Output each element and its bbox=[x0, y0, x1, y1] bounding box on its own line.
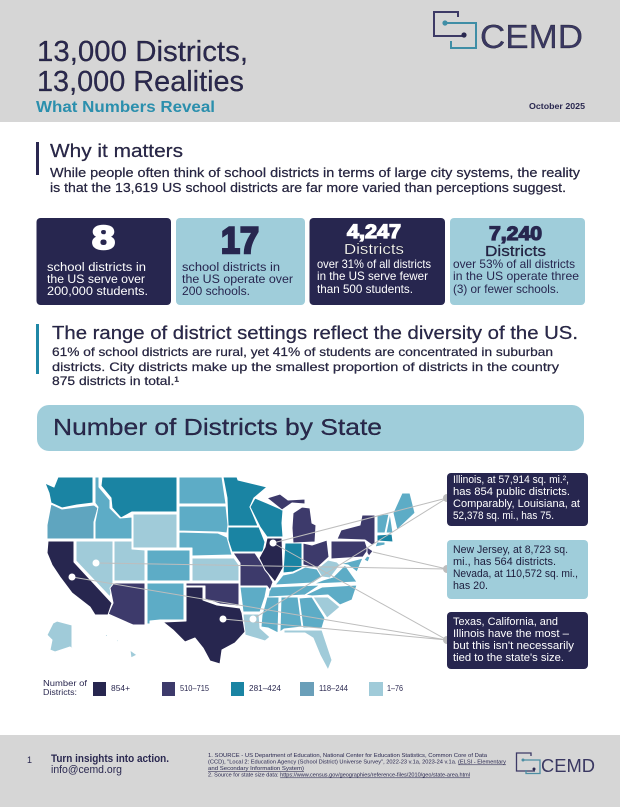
stat card: 4,247: than 500 students. bbox=[317, 283, 413, 296]
heading: range of settings: The range of district settings reflect the diversity of the US. bbox=[52, 323, 578, 343]
stat card: 17: 17 bbox=[221, 220, 259, 261]
footnotes: and Secondary Information System) bbox=[208, 766, 304, 772]
callout: Illinois: has 854 public districts. bbox=[453, 486, 570, 498]
stat card: 17: the US operate over bbox=[182, 272, 293, 286]
legend: Number of bbox=[43, 678, 88, 688]
header band bbox=[0, 0, 620, 122]
stat card: 8: 8 bbox=[92, 219, 115, 256]
callout: Texas, California, Illinois: Texas, California, and bbox=[453, 616, 558, 628]
callout: Illinois: Comparably, Louisiana, at bbox=[453, 498, 580, 510]
stat card: 8: school districts in bbox=[47, 260, 146, 274]
stat card: 7,240 bbox=[450, 218, 585, 305]
text block: range of settings: 875 districts in total.¹ bbox=[52, 374, 179, 388]
callout: New Jersey bbox=[447, 540, 588, 599]
callout: Texas, California, Illinois: tied to the state's size. bbox=[453, 652, 564, 664]
stat card: 7,240: (3) or fewer schools. bbox=[453, 282, 559, 296]
legend: 510–715 bbox=[180, 683, 209, 693]
section: range of district settings bbox=[36, 323, 578, 388]
text block: why it matters bbox=[50, 166, 581, 195]
footnotes: 1. SOURCE - US Department of Education, National Center for Education Statistics, Common Core of Data bbox=[208, 753, 488, 759]
map location dots bbox=[68, 540, 276, 622]
stat card: 17: 200 schools. bbox=[182, 284, 250, 298]
footnotes: 2. Source for state size data: https://www.census.gov/geographies/reference-files/2010/geo/state-area.html bbox=[208, 772, 470, 778]
leader lines bbox=[72, 494, 451, 644]
legend: Districts: bbox=[43, 687, 77, 697]
text block: why it matters: is that the 13,619 US school districts are far more varied than perceptions suggest. bbox=[50, 181, 566, 195]
legend: 854+ bbox=[111, 683, 130, 693]
icon: CEMD footer logo bbox=[516, 753, 595, 776]
stat card: 7,240: in the US operate three bbox=[453, 269, 579, 283]
title: 13,000 Realities bbox=[37, 66, 244, 98]
callout: Texas, California, Illinois bbox=[447, 612, 588, 669]
stat card: 17 bbox=[176, 218, 305, 305]
subtitle: What Numbers Reveal bbox=[36, 99, 215, 116]
banner: number of districts by state: Number of Districts by State bbox=[53, 414, 382, 440]
stat card: 17: school districts in bbox=[182, 260, 280, 274]
callout: Illinois bbox=[447, 473, 588, 526]
heading: why it matters: Why it matters bbox=[50, 141, 183, 161]
icon: CEMD footer logo: CEMD bbox=[541, 756, 595, 776]
date: October 2025 bbox=[529, 101, 585, 111]
stat card: 4,247: 4,247 bbox=[347, 222, 401, 243]
callout: New Jersey: Nevada, at 110,572 sq. mi., bbox=[453, 568, 578, 580]
call to action: Turn insights into action. bbox=[51, 753, 169, 765]
stat card: 4,247 bbox=[310, 218, 445, 305]
text block: range of settings: districts. City districts make up the smallest proportion of districts in the country bbox=[52, 360, 559, 374]
text block: range of settings bbox=[52, 345, 559, 388]
stat card: 7,240: Districts bbox=[485, 243, 546, 260]
stat card: 8: 200,000 students. bbox=[47, 284, 148, 298]
callout: Illinois: Illinois, at 57,914 sq. mi.², bbox=[453, 474, 569, 486]
text block: range of settings: 61% of school districts are rural, yet 41% of students are concentrated in suburban bbox=[52, 345, 553, 359]
callout: New Jersey: mi., has 564 districts. bbox=[453, 556, 556, 568]
callout: Texas, California, Illinois: but this isn't necessarily bbox=[453, 640, 575, 652]
callout: Texas, California, Illinois: Illinois have the most – bbox=[453, 628, 569, 640]
contact email: info@cemd.org bbox=[51, 764, 122, 776]
page number: 1 bbox=[27, 755, 32, 765]
stat card: 8: the US serve over bbox=[47, 272, 145, 286]
map: US states by number of districts bbox=[45, 477, 415, 670]
icon: CEMD logo bbox=[434, 12, 583, 55]
stat card: 4,247: in the US serve fewer bbox=[317, 270, 428, 283]
legend: 1–76 bbox=[387, 683, 403, 693]
title: 13,000 Districts, bbox=[37, 36, 248, 68]
callout: New Jersey: New Jersey, at 8,723 sq. bbox=[453, 544, 568, 556]
footnotes: (CCD), "Local 2: Education Agency (School District) Universe Survey", 2022-23 v.1a, 2023-24 v.1a. (ELSI - Elementary bbox=[208, 760, 506, 766]
callout: Illinois: 52,378 sq. mi., has 75. bbox=[453, 510, 554, 522]
stat card: 7,240: 7,240 bbox=[489, 224, 542, 245]
legend: 118–244 bbox=[319, 683, 348, 693]
icon: CEMD logo: CEMD bbox=[480, 18, 583, 55]
stat card: 8 bbox=[36, 218, 171, 305]
stat card: 7,240: over 53% of all districts bbox=[453, 257, 575, 271]
stat card: 4,247: over 31% of all districts bbox=[317, 258, 431, 271]
text block: why it matters: While people often think of school districts in terms of large city systems, the reality bbox=[50, 166, 581, 180]
legend bbox=[43, 678, 403, 697]
section: why it matters bbox=[36, 141, 581, 195]
legend: 281–424 bbox=[249, 683, 281, 693]
footnotes bbox=[208, 753, 506, 778]
title bbox=[37, 36, 248, 98]
stat card: 4,247: Districts bbox=[344, 241, 404, 258]
banner: number of districts by state bbox=[37, 405, 584, 451]
footer band bbox=[0, 735, 620, 807]
callout: New Jersey: has 20. bbox=[453, 580, 488, 592]
